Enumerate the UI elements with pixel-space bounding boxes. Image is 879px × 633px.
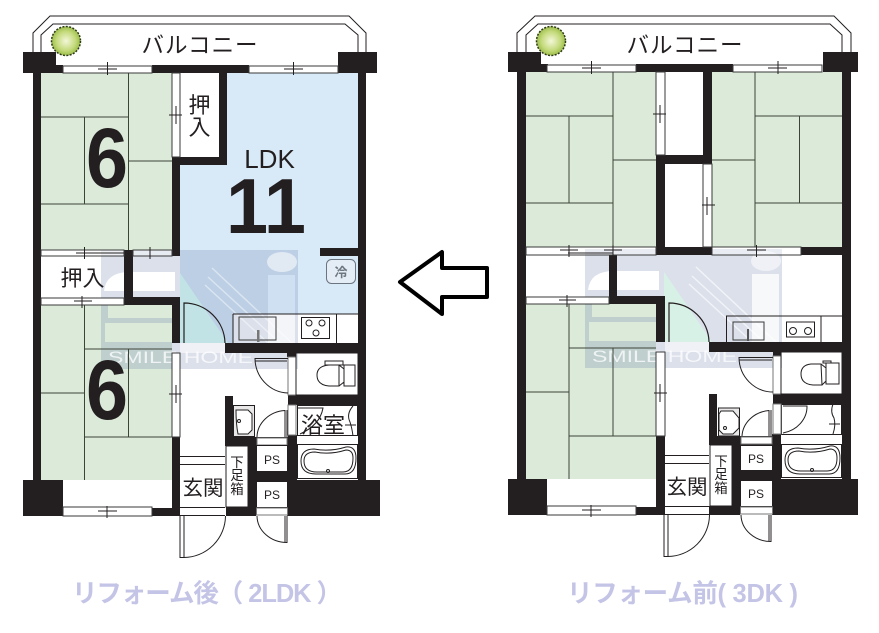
entrance: 玄関 (182, 471, 224, 501)
shoe cabinet: 箱 (714, 477, 728, 497)
PS shafts: PS (264, 488, 280, 502)
windows and sliding doors (526, 61, 822, 517)
wash basin (718, 408, 740, 436)
icon: refrigerator (326, 260, 356, 284)
PS door (741, 515, 771, 542)
walls (508, 52, 858, 515)
windows and sliding doors (41, 62, 338, 518)
door thresholds (665, 342, 781, 444)
PS door (257, 516, 287, 542)
toilet (781, 352, 842, 394)
closets: 押入 (60, 261, 105, 293)
toilet door (739, 358, 773, 392)
toilet door (255, 358, 288, 393)
entrance (665, 456, 709, 514)
bathroom (773, 404, 842, 434)
shoe cabinet (710, 445, 732, 506)
watermark (101, 250, 298, 369)
shoe cabinet: 箱 (230, 478, 244, 498)
room: LDK: 11 (226, 162, 306, 250)
shoe cabinet: 下 (714, 450, 728, 470)
wash basin (234, 406, 254, 436)
watermark (585, 249, 782, 368)
room: LDK (180, 73, 358, 343)
closets: 押 (188, 88, 211, 120)
dining door (669, 303, 709, 342)
bathtub (298, 444, 358, 478)
caption: before reform: リフォーム前( 3DK ) (567, 580, 798, 608)
room: south tatami (526, 304, 656, 479)
room: west tatami (526, 72, 656, 247)
entrance door (180, 516, 226, 558)
toilet (296, 353, 358, 395)
kitchen fixtures (726, 316, 842, 342)
bathtub (782, 444, 842, 478)
PS shafts: PS (748, 452, 764, 466)
room: east tatami (712, 72, 842, 247)
closets (60, 88, 211, 293)
balcony (517, 16, 851, 60)
watermark: SMILE HOME (592, 347, 737, 366)
icon: refrigerator: 冷 (334, 262, 348, 281)
shoe cabinet: 足 (714, 463, 728, 483)
balcony: バルコニー (142, 28, 258, 60)
room: south tatami 6 (41, 305, 172, 480)
closets: 入 (188, 110, 211, 142)
floor plan: after reform (2LDK) (23, 16, 380, 558)
tatami lines and number: south room: 6 (86, 343, 128, 437)
PS shafts (256, 446, 288, 515)
arrow: left (400, 252, 487, 314)
PS shafts: PS (748, 487, 764, 501)
watermark: SMILE HOME (108, 348, 253, 367)
washroom door (742, 410, 771, 436)
balcony (33, 16, 366, 60)
entrance door (664, 515, 710, 556)
shoe cabinet: 下 (230, 451, 244, 471)
floor plan: before reform (3DK) (508, 16, 858, 556)
shoe cabinet: 足 (230, 464, 244, 484)
icon: plant (536, 26, 566, 56)
balcony: バルコニー (626, 28, 742, 60)
entrance (180, 456, 225, 516)
bathroom (288, 405, 358, 440)
kitchen counter (233, 314, 358, 343)
LDK door (184, 303, 225, 343)
kitchen fixtures (233, 314, 358, 343)
washroom door (257, 410, 287, 437)
bathroom: 浴室 (301, 408, 345, 440)
tatami lines and number: south room (41, 305, 172, 480)
room: north tatami 6 (41, 73, 172, 250)
shoe cabinet (226, 446, 248, 507)
tatami lines: south room (526, 304, 656, 479)
icon: plant (52, 26, 80, 56)
PS shafts: PS (264, 453, 280, 467)
caption: after reform: リフォーム後（ 2LDK ） (72, 580, 342, 608)
entrance: 玄関 (666, 470, 708, 500)
PS shafts (740, 446, 772, 514)
walls (23, 52, 380, 516)
door thresholds (180, 343, 296, 445)
room: north tatami 6: 6 (86, 111, 128, 205)
room: LDK: LDK (244, 144, 295, 174)
